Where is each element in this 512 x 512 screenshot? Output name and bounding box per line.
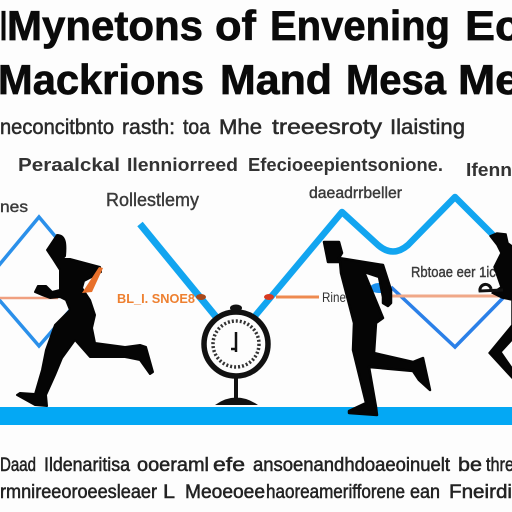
section headings: Efecioeepientsonione. [248, 155, 443, 175]
title: Envening [270, 2, 450, 49]
footer text [0, 455, 512, 503]
right blue wave line [250, 197, 498, 322]
footer text: Meoeoee [185, 482, 265, 503]
subtitle: treeesroty [272, 116, 383, 139]
right hand hook icon [480, 284, 503, 291]
stopwatch [204, 304, 268, 405]
right diamond line [391, 287, 503, 347]
footer text: ansoenandhdoaeoinuelt [253, 455, 451, 476]
runner right [489, 233, 512, 378]
footer text: Fneirdi [449, 482, 512, 503]
left diamond line [0, 217, 72, 346]
section headings [18, 155, 512, 180]
subtitle: rasth: [122, 116, 175, 139]
stopwatch stand [215, 376, 258, 405]
subtitle: Mhe [219, 116, 262, 139]
title: Mesa [346, 56, 447, 103]
runner centre [324, 242, 430, 415]
ground bar [0, 407, 512, 425]
right orange line [385, 294, 505, 298]
chart labels: nes [0, 199, 28, 216]
footer text: Daad [0, 455, 36, 476]
chart labels: daeadrrbeller [309, 185, 403, 202]
marker dot [264, 294, 274, 300]
footer text: efe [213, 455, 245, 476]
blue blob [370, 283, 388, 293]
centre orange label [264, 289, 346, 305]
centre orange label: Rine [322, 289, 346, 305]
title: Mand [220, 56, 332, 103]
chart labels: Rollestlemy [106, 190, 199, 210]
chart labels [0, 185, 504, 281]
footer text: Ildenaritisa [44, 455, 130, 476]
section headings: Ifenn [466, 160, 512, 180]
footer text: be [458, 455, 482, 476]
subtitle: toa [183, 116, 210, 139]
footer text: ooeraml [137, 455, 209, 476]
stopwatch hand [231, 332, 237, 352]
large blue wave line [140, 224, 217, 318]
subtitle: neconcitbnto [0, 116, 114, 139]
subtitle: Ilaisting [390, 116, 465, 139]
stopwatch face [204, 312, 268, 376]
marker dot [196, 294, 206, 300]
orange arm band [82, 267, 103, 293]
left orange line [0, 297, 58, 299]
title: Mackrions [0, 56, 204, 103]
section headings: Peraalckal [18, 155, 120, 175]
footer text: ean [410, 482, 440, 503]
subtitle [0, 116, 465, 139]
footer text: haoreamerifforene [266, 482, 405, 503]
section headings: Ilenniorreed [127, 155, 238, 175]
title [0, 2, 512, 103]
title: Mynetons [7, 2, 203, 49]
footer text: L [163, 482, 175, 503]
stopwatch knob [230, 304, 242, 312]
runner left [17, 235, 153, 406]
left orange label: BL_I. SNOE8 [117, 291, 195, 306]
title: I [0, 2, 7, 49]
footer text: rmnireeoroeesleaer [0, 482, 158, 503]
title: of [215, 2, 257, 49]
